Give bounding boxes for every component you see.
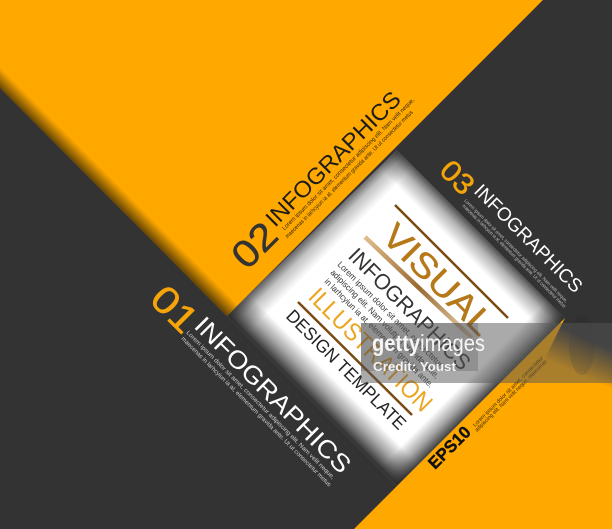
- number 03: 03: [433, 154, 480, 202]
- centre body text: in larhcyiun ia at, elementum gravida ante.: [323, 276, 436, 389]
- title VISUAL: VISUAL: [374, 216, 502, 343]
- body 01: Lorem ipsum dolor sit amet, consectetur adipiscing elit. Nam velit neque,: [185, 330, 335, 481]
- watermark band: [361, 323, 612, 383]
- EPS body text: adipiscing elit. Nam velit neque, maecenas: [474, 359, 549, 433]
- block EPS10: [424, 355, 549, 473]
- orange panel 02: [0, 0, 543, 316]
- EPS body text: Lorem ipsum dolor sit amet, consectetur: [472, 355, 545, 428]
- body 01: maecenas in larhcyiun ia at, elementum gravida ante. Ut ut consectetur metus: [180, 336, 332, 488]
- centre body text: adipiscing elit. Nam volutpat gravida ante,: [329, 267, 442, 380]
- dark panel 03: [397, 0, 612, 318]
- orange bottom panel shadow: [540, 318, 612, 392]
- orange panel shadow: [0, 57, 238, 316]
- orange panel bottom right: [354, 318, 612, 529]
- block 03: [433, 154, 586, 310]
- gradient bar: [365, 237, 472, 338]
- block 02: [224, 86, 416, 277]
- number 02: 02: [224, 214, 287, 277]
- heading 02: INFOGRAPHICS: [260, 86, 406, 232]
- centre body text: Lorem ipsum dolor sit amet, consectetur: [336, 259, 445, 369]
- body 03: Lorem ipsum dolor sit amet, consectetur adipiscing elit. Nam velit neque,: [463, 198, 569, 304]
- subtitle INFOGRAPHICS: INFOGRAPHICS: [343, 243, 476, 375]
- top rule: [395, 205, 508, 318]
- EPS10 label: EPS10: [424, 423, 475, 473]
- number 01: 01: [142, 278, 206, 342]
- body 02: maecenas in larhcyiun ia at, elementum gravida ante. Ut ut consectetur metus: [285, 110, 415, 240]
- body 02: Lorem ipsum dolor sit amet, consectetur adipiscing elit. Nam velit neque,: [282, 97, 416, 232]
- body 03: maecenas in larhcyiun ia at, elementum gravida ante. Ut ut consectetur metus: [461, 203, 567, 310]
- lower rule: [298, 302, 412, 415]
- heading 01: INFOGRAPHICS: [189, 311, 356, 479]
- white centre square: [227, 150, 565, 486]
- watermark credit: Credit: Youst: [373, 360, 457, 374]
- block 01: [142, 278, 356, 488]
- watermark inner box: [361, 323, 478, 371]
- heading 03: INFOGRAPHICS: [469, 181, 586, 297]
- DESIGN TEMPLATE: DESIGN TEMPLATE: [282, 306, 410, 434]
- watermark logo: gettyimages: [372, 330, 485, 356]
- title ILLUSTRATION: ILLUSTRATION: [303, 282, 438, 418]
- centre title block: [282, 205, 508, 434]
